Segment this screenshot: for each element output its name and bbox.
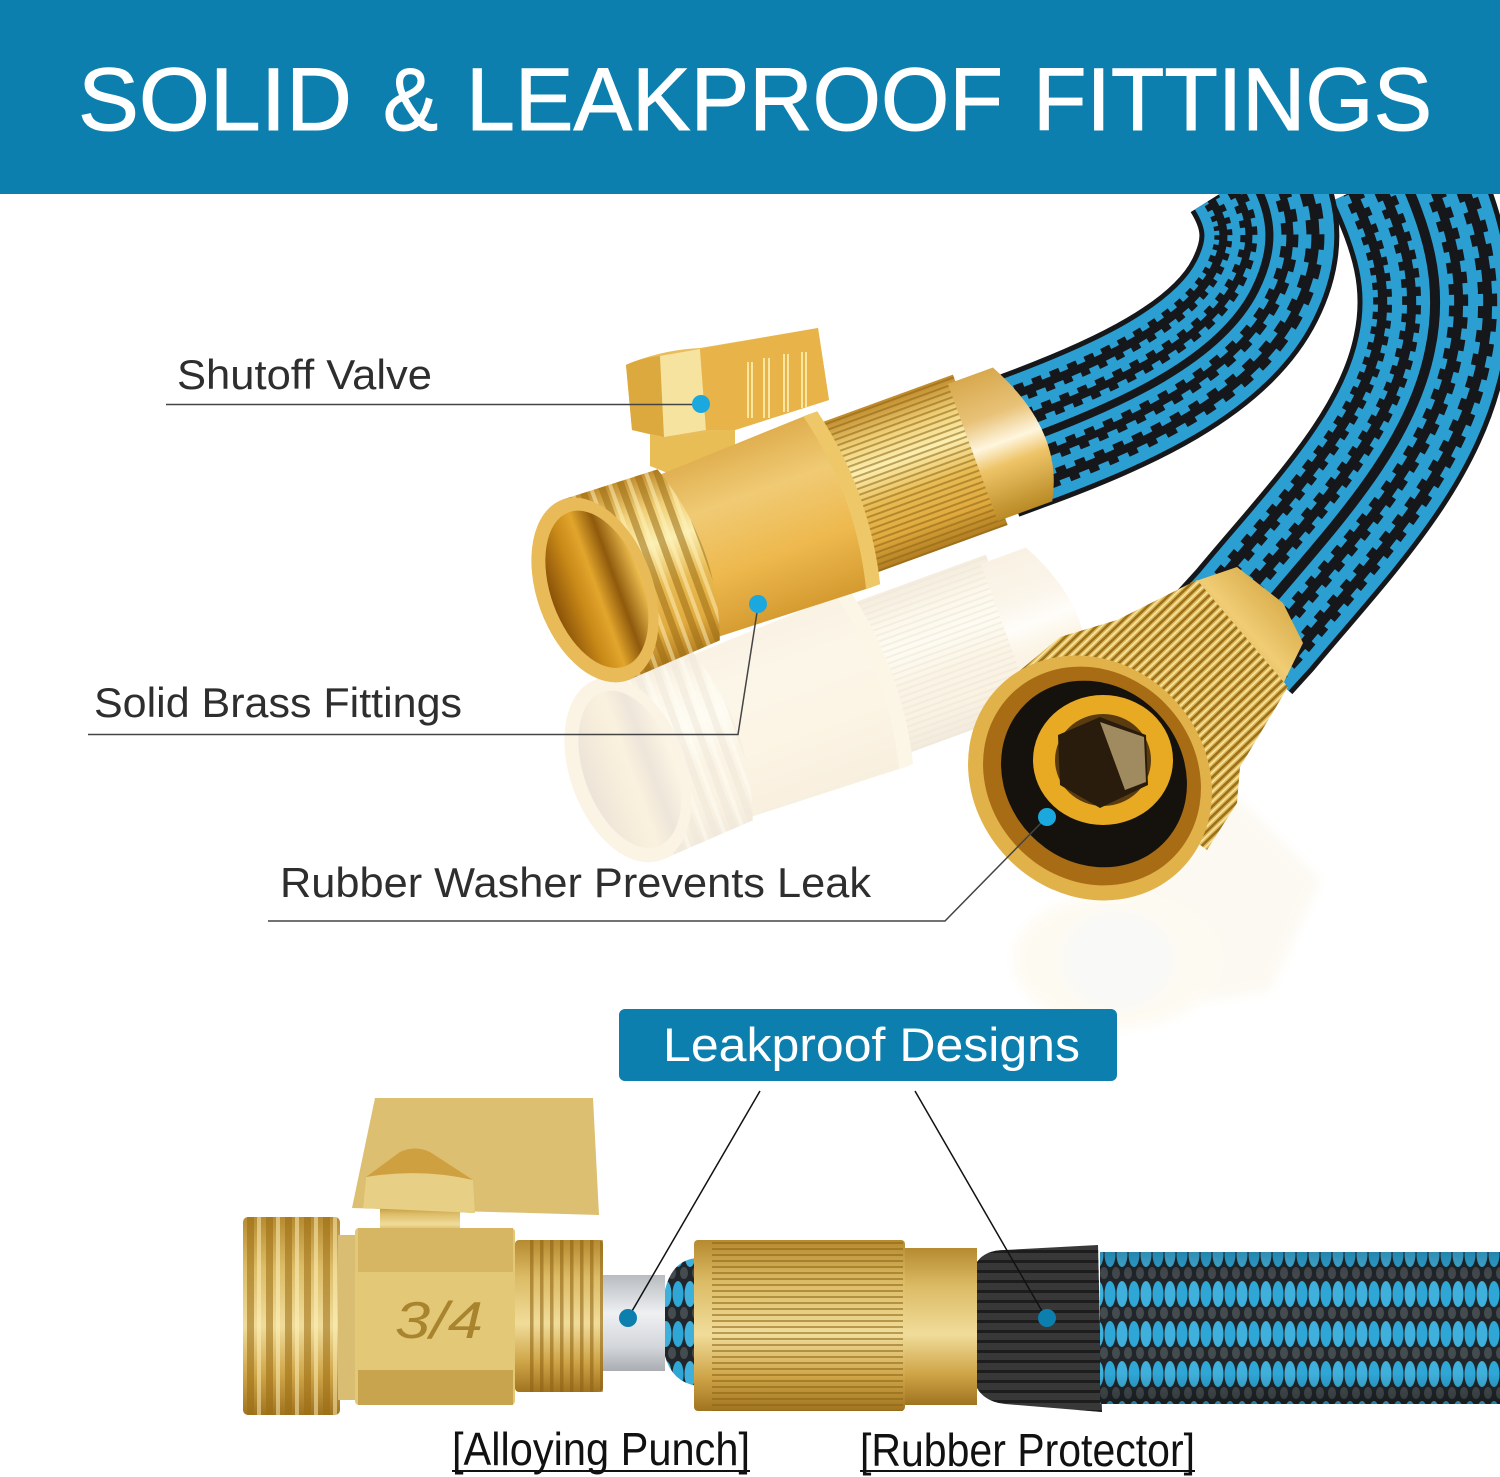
- hose: lower coil: [1235, 170, 1435, 642]
- upper brass fitting: [508, 337, 1074, 700]
- lower product: hose stub and alloying punch: [603, 1258, 697, 1386]
- reflections of the fittings: [541, 517, 1320, 1028]
- callout: leakproof designs badge: [619, 1009, 1117, 1081]
- callout: rubber washer: [268, 808, 1056, 921]
- callout: solid brass fittings: Solid Brass Fittings: [94, 679, 462, 726]
- callout: shutoff valve: [166, 351, 710, 413]
- title: &: [383, 49, 438, 149]
- title: FITTINGS: [1033, 49, 1432, 149]
- title: [78, 49, 1432, 149]
- hose: upper coil: [995, 175, 1269, 451]
- title: SOLID: [78, 49, 352, 149]
- lower product: braided hose: [1100, 1252, 1500, 1404]
- callout: solid brass fittings: [88, 595, 767, 734]
- callout: rubber protector: [860, 1091, 1195, 1476]
- callout: leakproof designs badge: Leakproof Designs: [663, 1018, 1080, 1071]
- header banner: [0, 0, 1500, 194]
- callout: alloying punch: [Alloying Punch]: [452, 1423, 750, 1475]
- lower product: valve body with 3/4 marking: [243, 1217, 603, 1415]
- lower product: valve handle: [352, 1098, 599, 1240]
- lower brass connector with rubber washer: [918, 567, 1303, 951]
- title: LEAKPROOF: [466, 49, 1003, 149]
- callout: rubber protector: [Rubber Protector]: [860, 1424, 1195, 1476]
- lower product: knurled coupler and collar: [694, 1240, 977, 1411]
- callout: shutoff valve: Shutoff Valve: [177, 351, 432, 398]
- callout: alloying punch: [452, 1091, 760, 1475]
- lower product: black rubber protector: [977, 1245, 1102, 1412]
- callout: rubber washer: Rubber Washer Prevents Leak: [280, 859, 872, 906]
- icon: shutoff valve handle: [626, 328, 829, 482]
- lower product: valve body with 3/4 marking: 3/4: [395, 1292, 483, 1350]
